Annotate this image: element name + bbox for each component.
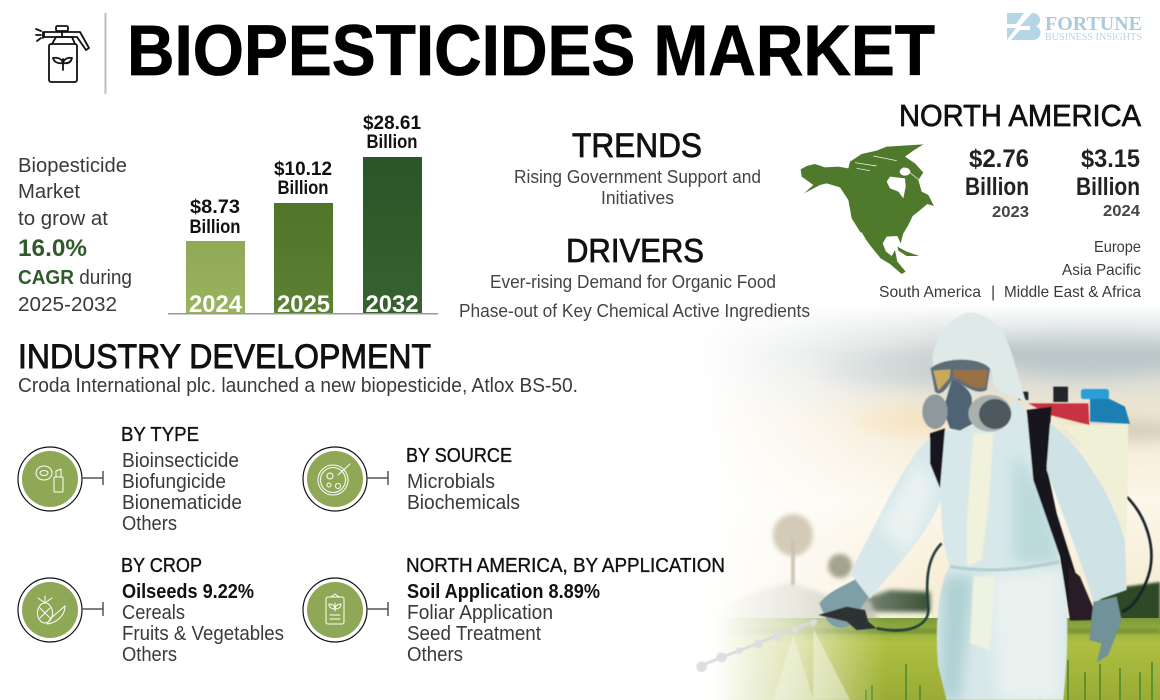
trends: TRENDS	[572, 127, 702, 165]
CAGR text block: CAGR during	[18, 267, 132, 289]
stat: North America 2023: 2023	[992, 204, 1029, 221]
right hose	[1122, 497, 1151, 612]
logo: Fortune Business Insights: BUSINESS INSIGHTS	[1045, 32, 1142, 43]
stat: North America 2024: 2024	[1103, 203, 1140, 220]
bar chart: 2032	[366, 291, 418, 318]
bar chart: $8.73	[190, 197, 240, 218]
stat: North America 2023: $2.76	[969, 145, 1029, 173]
industry development: Croda International plc. launched a new biopesticide, Atlox BS-50.	[18, 375, 578, 397]
drivers: DRIVERS	[566, 232, 704, 269]
trends: Rising Government Support and	[514, 167, 761, 187]
title: BIOPESTICIDES MARKET	[127, 12, 935, 91]
segment: North America by application: NORTH AMERICA, BY APPLICATION	[406, 555, 725, 577]
rice field	[726, 582, 1160, 700]
stat: North America 2024	[1076, 145, 1140, 220]
bar chart	[168, 113, 438, 318]
segment: by type: Biofungicide	[122, 471, 226, 493]
stat: North America 2023	[965, 145, 1029, 221]
palm trees	[773, 514, 852, 585]
gas mask	[922, 360, 1012, 432]
trends: Initiatives	[601, 188, 674, 208]
icon: petri dish	[303, 447, 388, 511]
spray lance and mist	[696, 619, 850, 700]
header icon: pressure sprayer	[36, 26, 89, 82]
right sleeve	[1047, 423, 1127, 602]
backpack straps	[930, 407, 1098, 621]
map: North America	[801, 144, 934, 274]
segment: North America by application: Soil Application 8.89%	[407, 581, 600, 603]
bar chart: $10.12	[274, 159, 332, 180]
bar chart: $28.61	[363, 113, 421, 134]
segment: by crop: Others	[122, 644, 177, 666]
bar chart: Billion	[190, 217, 240, 238]
CAGR text block: Biopesticide	[18, 155, 127, 177]
stat: North America 2023: Billion	[965, 173, 1029, 201]
header divider	[104, 13, 106, 94]
segment: by source: Biochemicals	[407, 492, 520, 514]
icon: microbe and bottle	[18, 447, 103, 511]
segment: North America by application: Others	[407, 644, 463, 666]
CAGR text block: to grow at	[18, 208, 108, 230]
photo: worker spraying a rice field	[696, 312, 1160, 700]
bar chart: 2024	[189, 291, 243, 318]
drivers: Phase-out of Key Chemical Active Ingredients	[459, 301, 810, 321]
other regions list: Asia Pacific	[1062, 262, 1141, 279]
photo background: sky and treeline	[749, 312, 1160, 700]
stat: North America 2024: $3.15	[1081, 145, 1140, 173]
segment: by crop: Fruits & Vegetables	[122, 623, 284, 645]
protective suit	[850, 400, 1067, 700]
other regions list: |	[991, 284, 995, 301]
segment: by type: Bioinsecticide	[122, 450, 239, 472]
CAGR text block	[18, 155, 132, 316]
other regions list: Middle East & Africa	[1004, 284, 1141, 301]
trends	[514, 127, 761, 208]
CAGR text block: Market	[18, 181, 80, 203]
segment: by crop: Oilseeds 9.22%	[122, 581, 254, 603]
segment: by source: Microbials	[407, 471, 495, 493]
segment: by crop	[18, 555, 284, 666]
logo: Fortune Business Insights	[1007, 13, 1142, 43]
other regions list	[879, 239, 1141, 301]
drivers: Ever-rising Demand for Organic Food	[490, 272, 776, 292]
bar chart: Billion	[366, 132, 418, 153]
segment: by type: Bionematicide	[122, 492, 242, 514]
segment: North America by application: Foliar Application	[407, 602, 553, 624]
worker figure	[696, 313, 1151, 700]
CAGR text block: 2025-2032	[18, 294, 117, 316]
heading: North America: NORTH AMERICA	[899, 98, 1141, 133]
segment: by type: Others	[122, 513, 177, 535]
logo: Fortune Business Insights: FORTUNE	[1045, 13, 1142, 35]
other regions list: South America	[879, 284, 981, 301]
industry development	[18, 338, 578, 397]
backpack tanks	[1018, 387, 1130, 540]
bar chart: Billion	[278, 178, 328, 199]
segment: by type: BY TYPE	[121, 424, 199, 446]
segment: North America by application: Seed Treatment	[407, 623, 541, 645]
segment: by source	[303, 445, 520, 514]
left hose	[877, 543, 942, 630]
other regions list: Europe	[1094, 239, 1141, 256]
segment: by crop: Cereals	[122, 602, 185, 624]
bar chart: 2025	[277, 291, 330, 318]
segment: by source: BY SOURCE	[406, 445, 512, 467]
right glove	[1089, 597, 1122, 663]
segment: by type	[18, 424, 242, 535]
icon: clipboard with plant	[303, 578, 388, 642]
stat: North America 2024: Billion	[1076, 173, 1140, 201]
hood	[932, 313, 1027, 403]
segment: by crop: BY CROP	[121, 555, 202, 577]
drivers	[459, 232, 810, 321]
CAGR text block: 16.0%	[18, 235, 87, 262]
left glove and spray gun	[818, 579, 877, 630]
icon: pineapple and melon	[18, 578, 103, 642]
industry development: INDUSTRY DEVELOPMENT	[18, 338, 431, 376]
segment: North America by application	[303, 555, 725, 666]
